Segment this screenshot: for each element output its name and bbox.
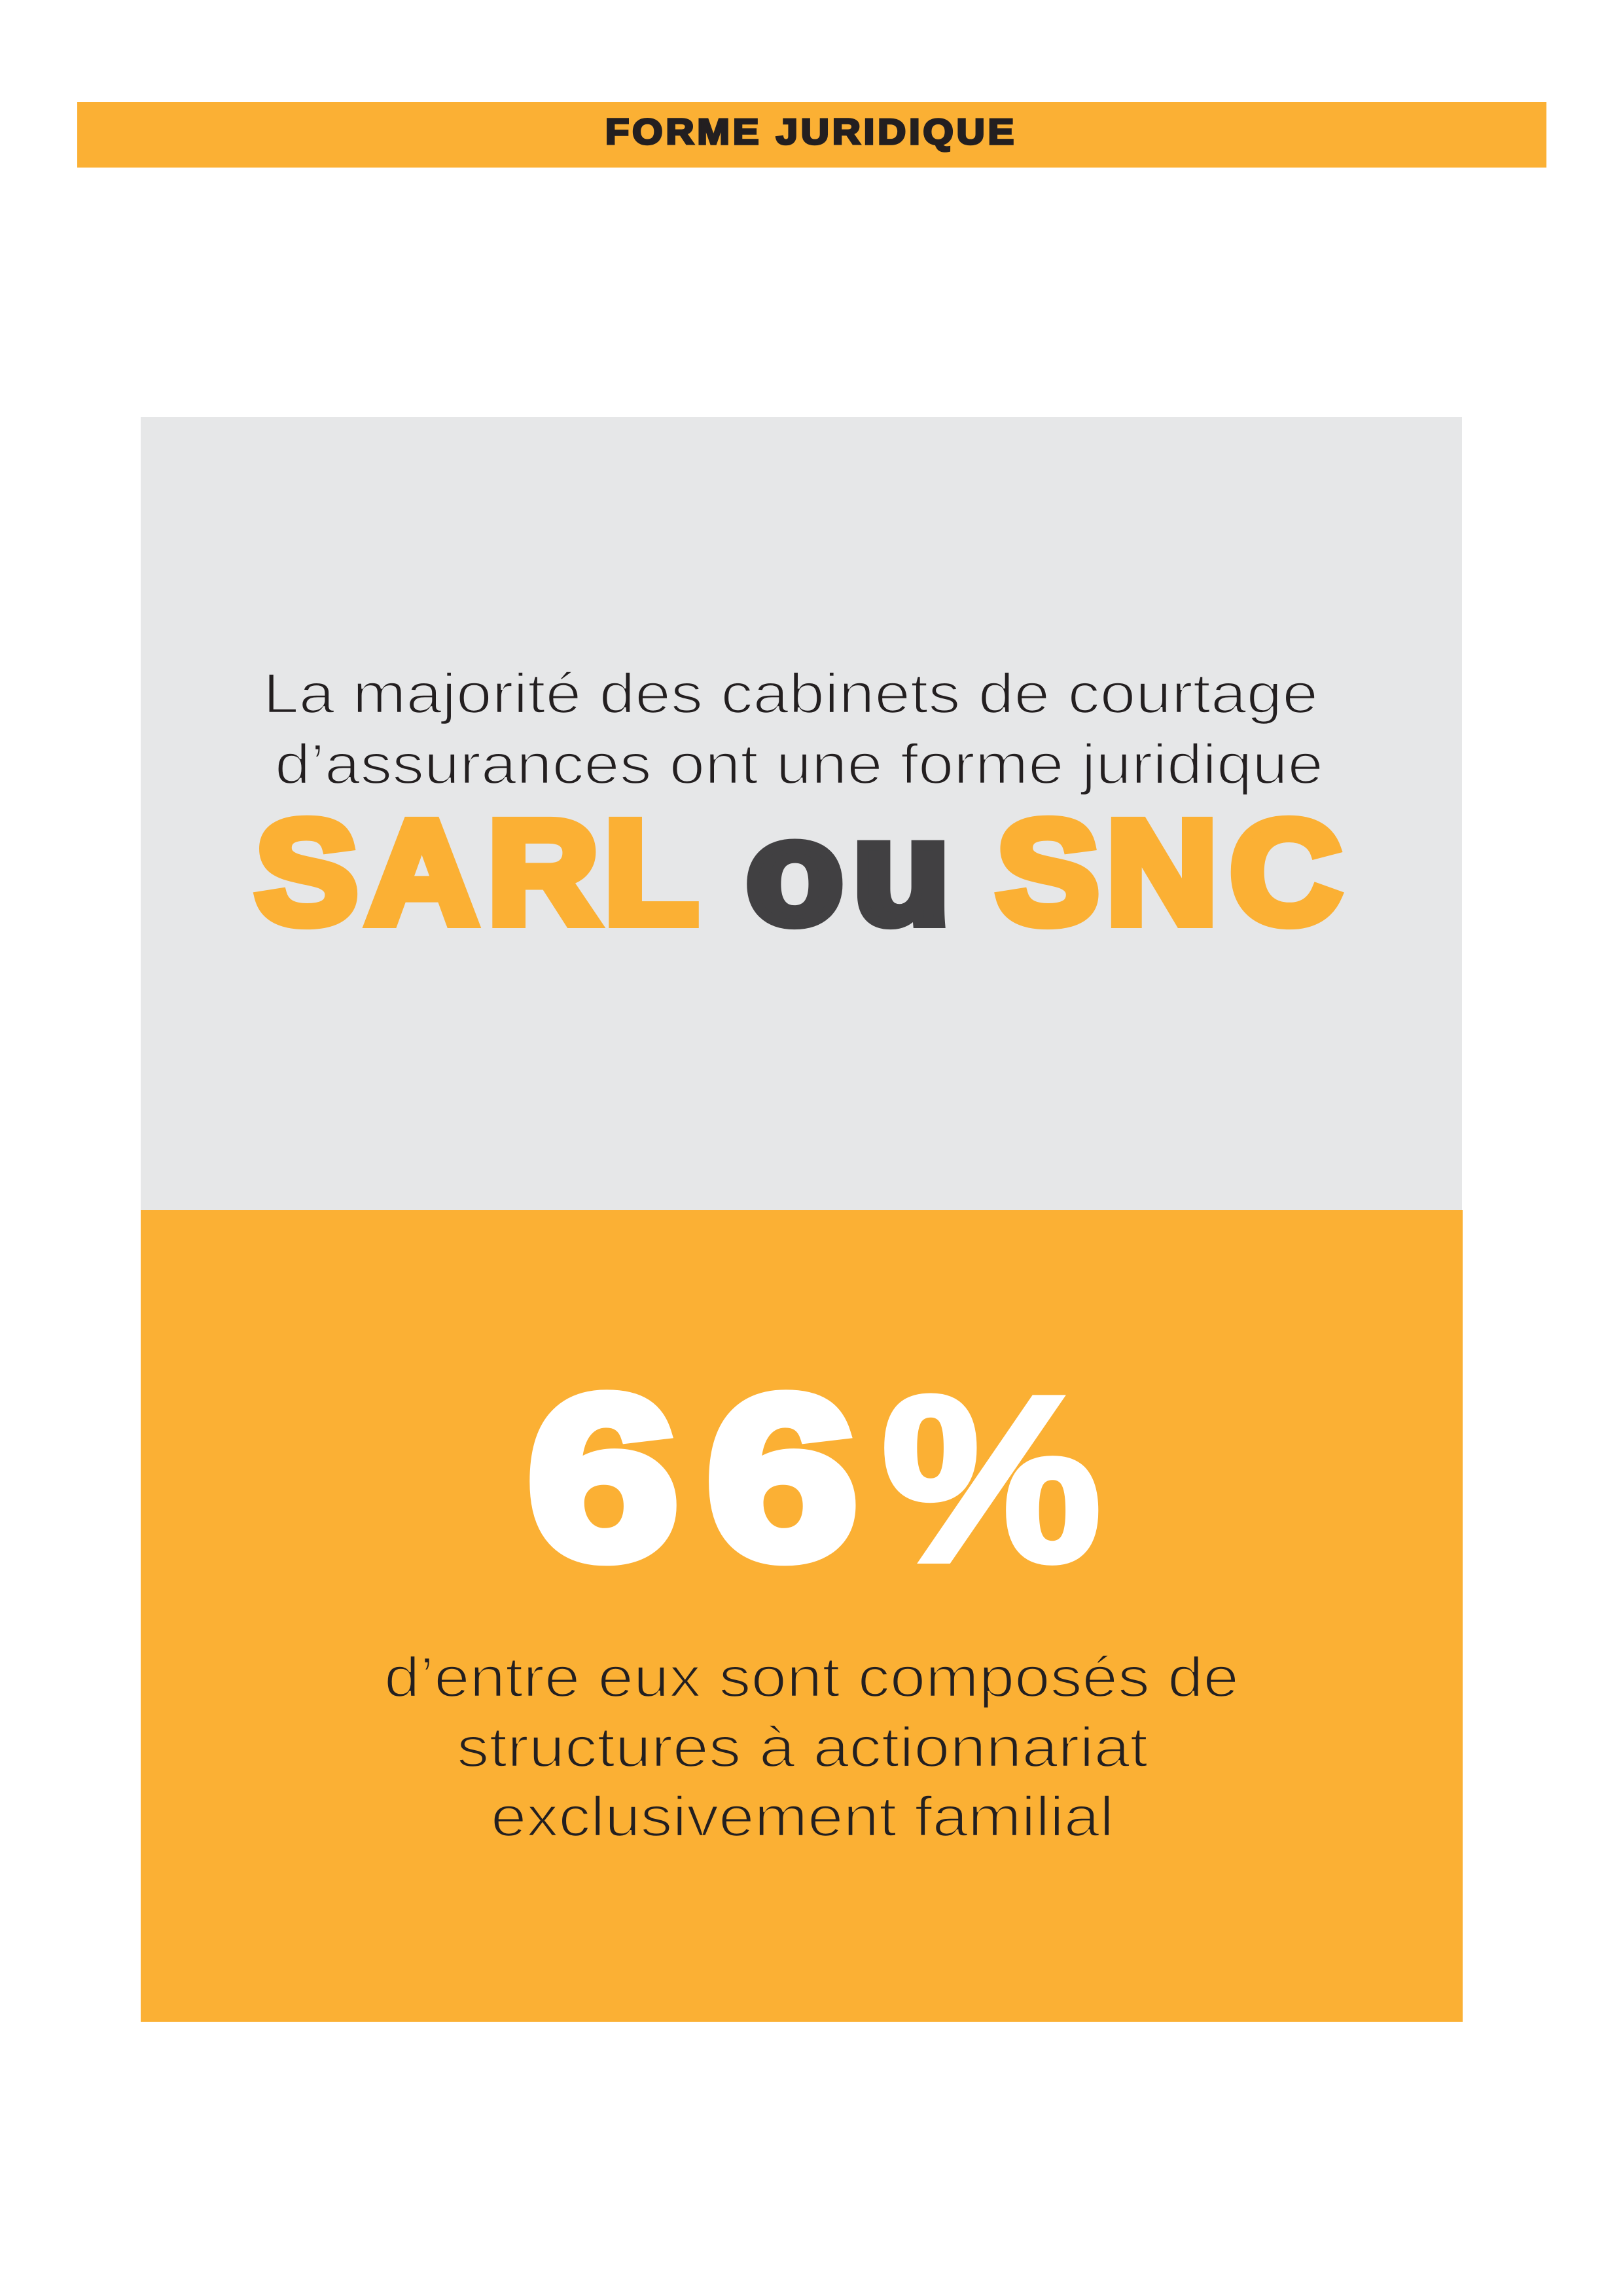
- heading: forme juridique: FORME JURIDIQUE: [605, 112, 1014, 152]
- intro text: [263, 662, 1323, 796]
- description text: d’entre eux sont composés de: [384, 1646, 1239, 1709]
- description text: [384, 1646, 1239, 1848]
- panel: SARL ou SNC: [141, 417, 1462, 1210]
- headline: SARL ou SNC: SNC: [996, 790, 1341, 954]
- big number: 66%: %: [882, 1348, 1101, 1611]
- headline: SARL ou SNC: ou: [746, 791, 950, 954]
- big number: 66%: [527, 1348, 1101, 1611]
- panel: 66%: [141, 1210, 1463, 2022]
- headline: SARL ou SNC: SARL: [255, 790, 698, 954]
- grey panel background: [141, 417, 1462, 1210]
- orange panel background: [141, 1210, 1463, 2022]
- description text: structures à actionnariat: [457, 1716, 1148, 1779]
- big number: 66%: 66: [527, 1348, 858, 1606]
- header background: [77, 102, 1546, 168]
- header bar: [77, 102, 1546, 168]
- headline: SARL ou SNC: [255, 790, 1341, 954]
- intro text: La majorité des cabinets de courtage: [263, 662, 1318, 725]
- description text: exclusivement familial: [491, 1785, 1114, 1848]
- intro text: d’assurances ont une forme juridique: [275, 733, 1323, 796]
